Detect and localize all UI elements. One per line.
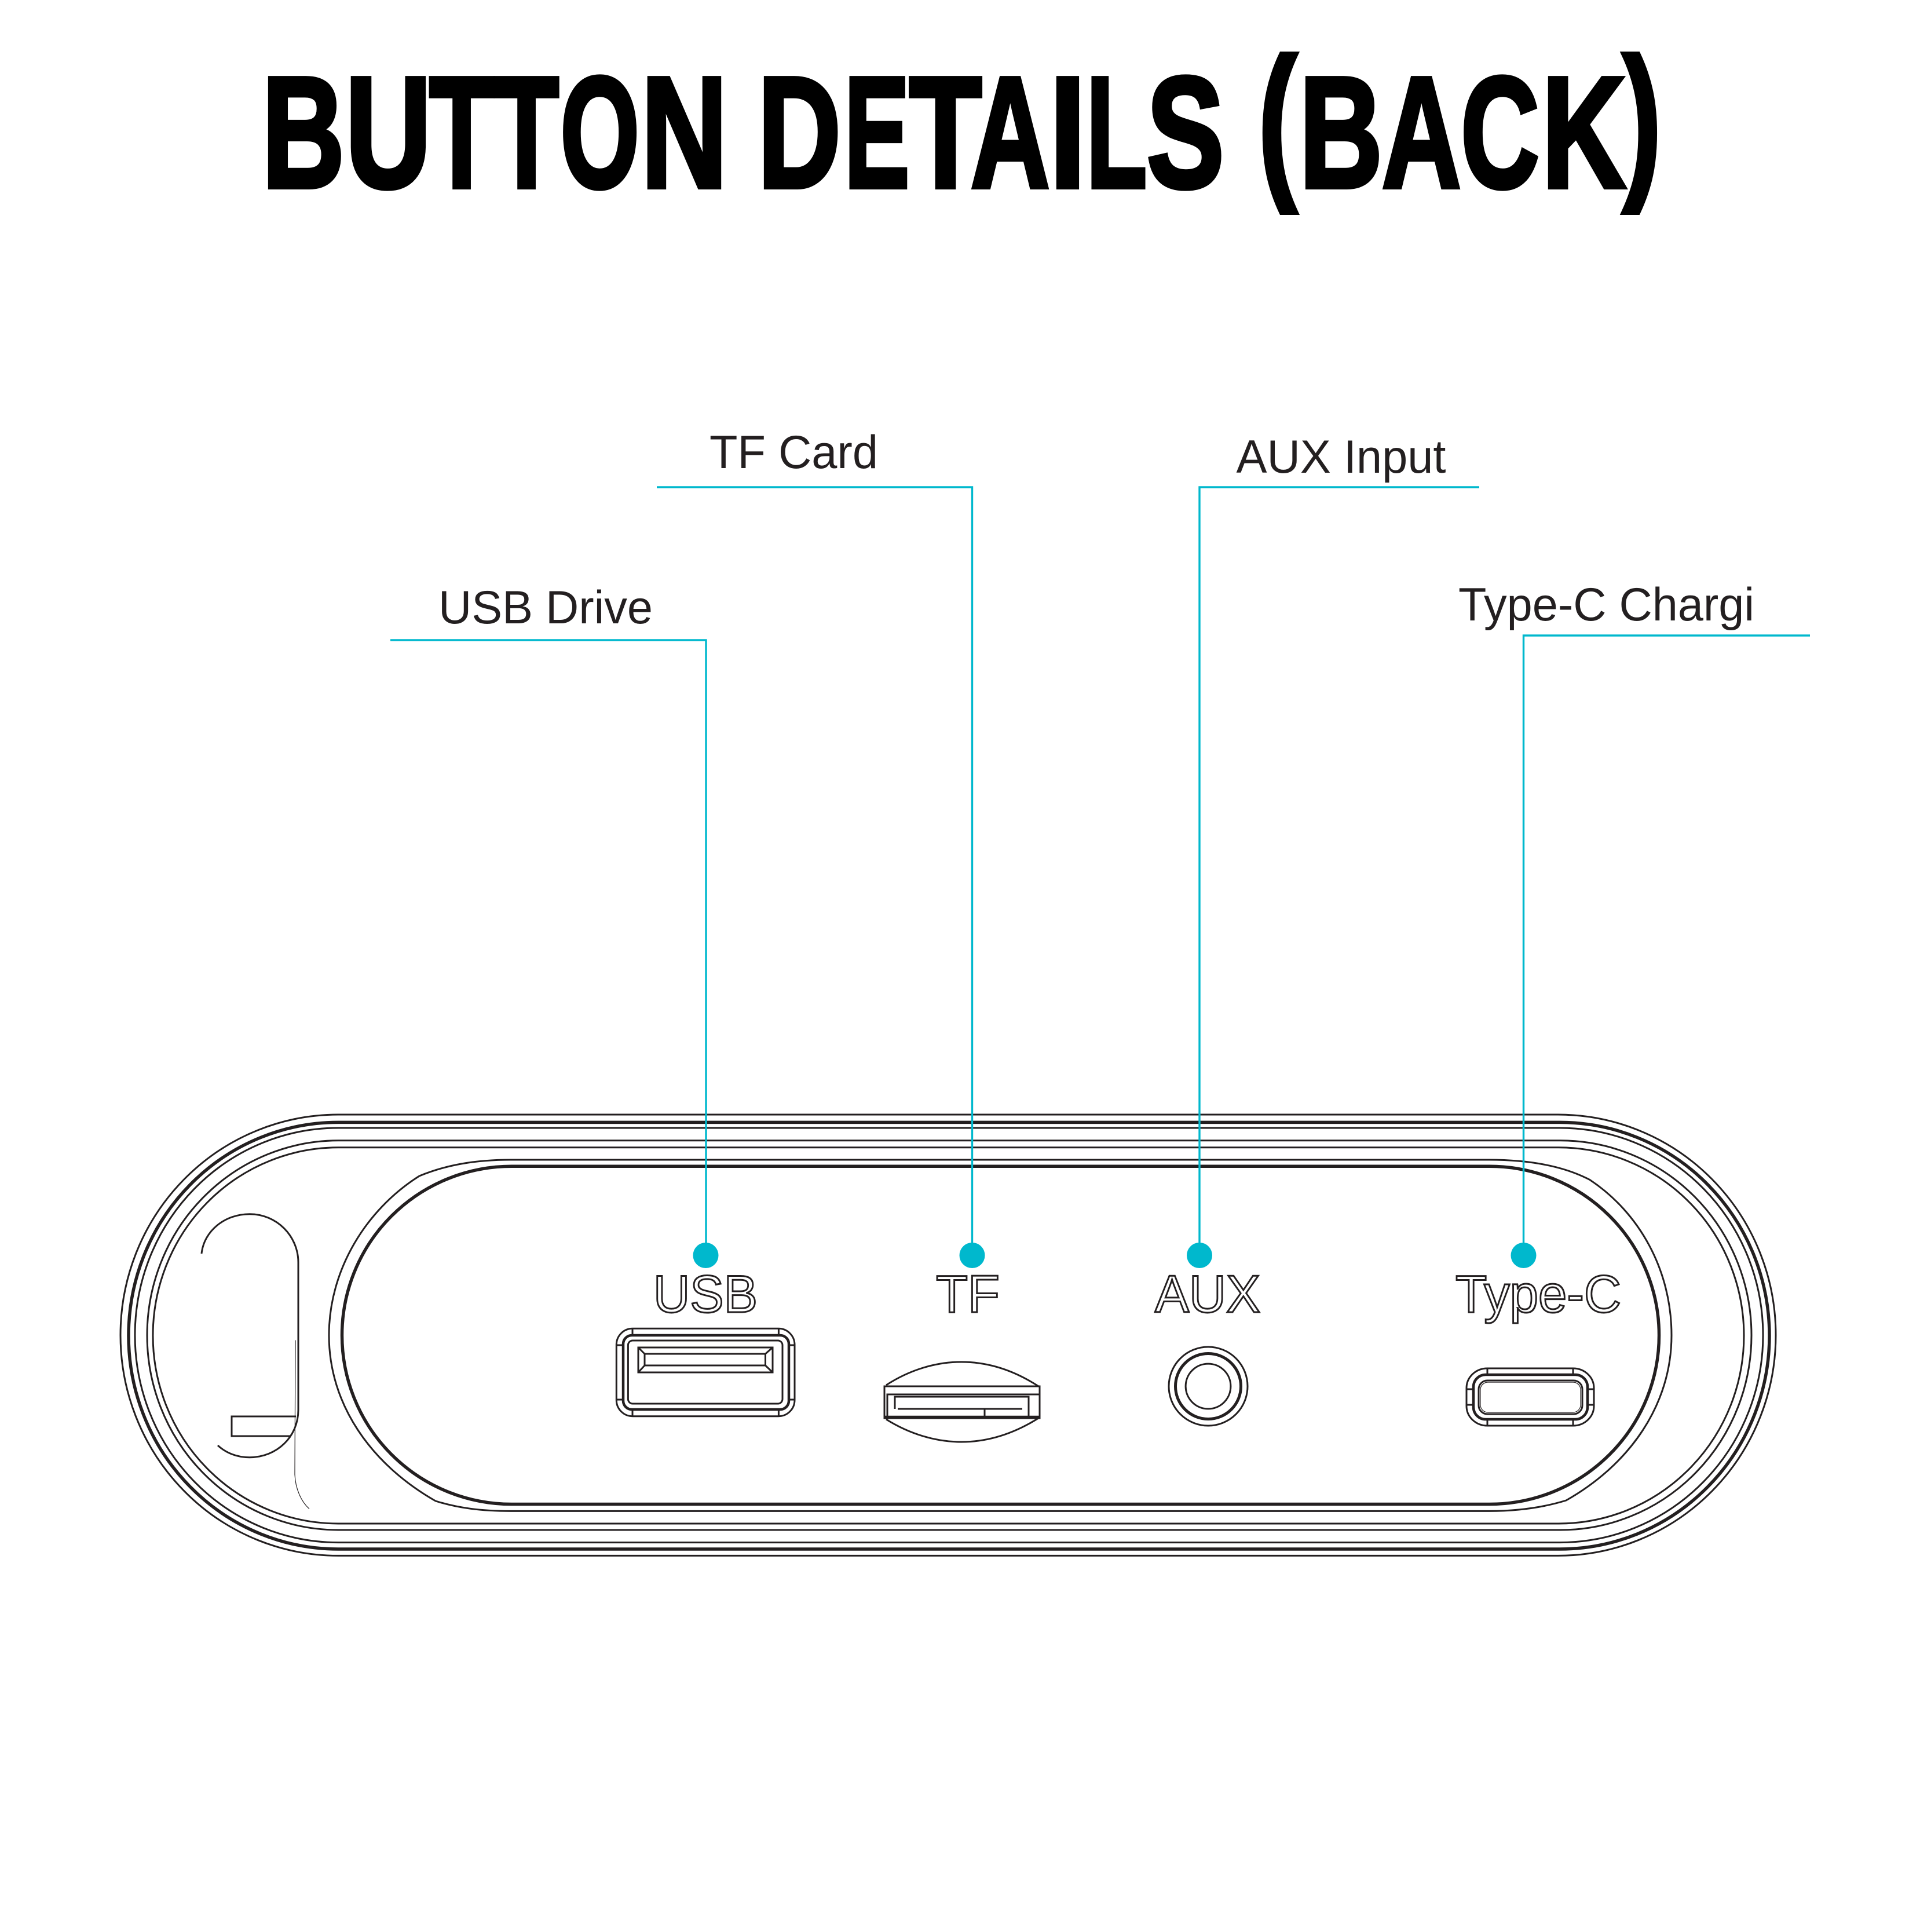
port label: Type-C: Type-C xyxy=(1455,1265,1621,1324)
title: L xyxy=(1087,44,1147,221)
port: USB xyxy=(616,1265,795,1416)
port: Type-C xyxy=(1455,1265,1621,1426)
leader line: TF Card xyxy=(657,487,972,1256)
callout: AUX Input xyxy=(1187,431,1479,1268)
body: outer contour rings xyxy=(120,1115,1776,1555)
icon: Type-C socket xyxy=(1466,1368,1594,1426)
icon: TF card slot xyxy=(884,1362,1040,1442)
title: T xyxy=(429,44,494,221)
leader line: AUX Input xyxy=(1199,487,1479,1256)
port label: USB: USB xyxy=(653,1265,758,1324)
dot: TF xyxy=(959,1243,985,1268)
port label: AUX: AUX xyxy=(1155,1265,1260,1324)
title: T xyxy=(494,44,559,221)
dot: USB xyxy=(693,1243,718,1268)
callout: TF Card xyxy=(657,426,985,1268)
label: USB Drive: USB Drive xyxy=(438,582,653,634)
title: ) xyxy=(1623,24,1661,214)
callout: Type-C Charging xyxy=(1458,579,1810,1268)
leader line: Type-C xyxy=(1523,636,1810,1256)
dot: AUX xyxy=(1187,1243,1212,1268)
title: A xyxy=(1382,44,1461,221)
label: Type-C Chargi: Type-C Chargi xyxy=(1458,579,1754,631)
title: S xyxy=(1147,44,1224,221)
title: C xyxy=(1461,44,1539,221)
title: B xyxy=(262,44,345,221)
port: TF xyxy=(884,1265,1040,1442)
title: E xyxy=(844,44,909,221)
port: AUX xyxy=(1155,1265,1260,1426)
leader line: USB Drive xyxy=(390,640,706,1256)
callout: USB Drive xyxy=(390,582,718,1268)
title: I xyxy=(1049,44,1086,221)
dot: Type-C xyxy=(1511,1243,1536,1268)
label: TF Card: TF Card xyxy=(710,426,878,479)
title: B xyxy=(1300,44,1383,221)
title: D xyxy=(758,44,841,221)
title: T xyxy=(909,44,982,221)
device outline: back panel of speaker xyxy=(120,1115,1776,1555)
title: K xyxy=(1542,44,1626,221)
recessed panel xyxy=(329,1160,1672,1511)
left slot detail xyxy=(202,1214,309,1509)
title: A xyxy=(971,44,1049,221)
title: ( xyxy=(1258,24,1298,214)
port label: TF: TF xyxy=(936,1265,1000,1324)
icon: AUX jack xyxy=(1169,1347,1248,1426)
label: AUX Input: AUX Input xyxy=(1236,431,1446,483)
title: N xyxy=(641,44,727,221)
title: O xyxy=(561,44,639,221)
icon: USB socket xyxy=(616,1328,795,1416)
title: U xyxy=(345,44,431,221)
